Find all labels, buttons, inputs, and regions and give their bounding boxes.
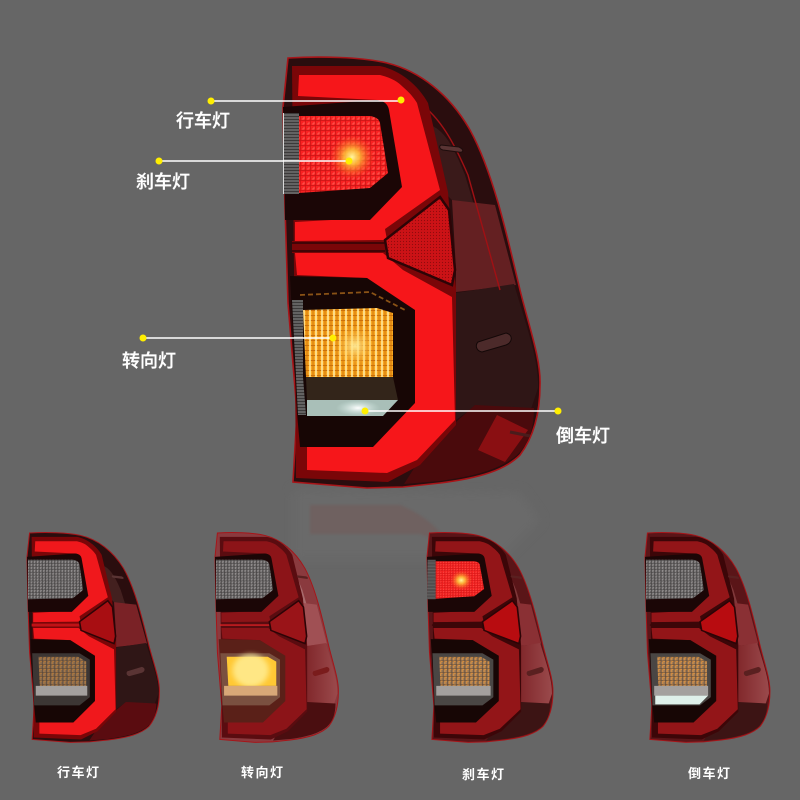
lower turn and reverse lamp window bbox=[290, 276, 415, 447]
main tail lamp bbox=[283, 57, 540, 488]
label: running light: 行车灯 bbox=[57, 765, 101, 780]
lamp reflection bbox=[293, 490, 540, 560]
callout: turn signal: 转向灯 bbox=[122, 351, 176, 371]
thumbnail: turn signal bbox=[215, 533, 338, 742]
side reflector bbox=[385, 197, 455, 285]
callout: running light: 行车灯 bbox=[176, 111, 230, 131]
side handle details bbox=[440, 145, 511, 352]
upper brake lamp window bbox=[283, 100, 402, 220]
callout: reverse light bbox=[362, 408, 610, 446]
callout: reverse light: 倒车灯 bbox=[556, 426, 610, 446]
callout: brake light: 刹车灯 bbox=[136, 172, 190, 192]
label: reverse light: 倒车灯 bbox=[688, 766, 732, 781]
running light band bbox=[292, 66, 456, 482]
callout: turn signal bbox=[122, 334, 336, 371]
thumbnail: brake light bbox=[427, 533, 553, 742]
thumbnail: running light bbox=[27, 533, 159, 742]
callout: running light bbox=[176, 96, 404, 131]
smoked side panels bbox=[404, 100, 538, 484]
thumbnail: reverse light bbox=[645, 533, 770, 742]
label: brake light: 刹车灯 bbox=[462, 767, 506, 782]
lamp housing bbox=[283, 57, 540, 488]
callout: brake light bbox=[136, 158, 352, 192]
label: turn signal: 转向灯 bbox=[241, 765, 285, 780]
